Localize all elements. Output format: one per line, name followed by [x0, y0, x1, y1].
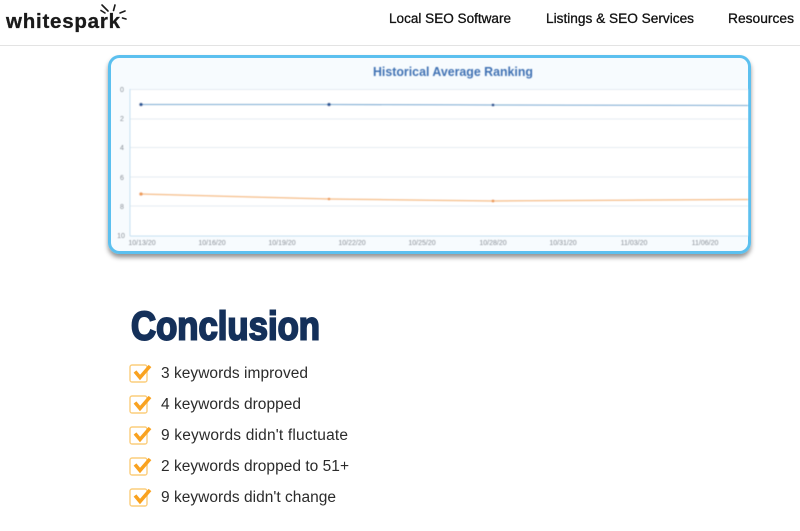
series: orange line	[139, 192, 748, 202]
y axis labels: 0	[120, 87, 124, 94]
icon: spark rays	[101, 5, 126, 19]
checklist	[130, 365, 349, 506]
y axis labels: 6	[120, 175, 124, 182]
item: 9 keywords didn't fluctuate: 9 keywords didn't fluctuate	[161, 427, 348, 444]
chart title: Historical Average Ranking	[373, 65, 533, 79]
header	[0, 5, 800, 46]
x axis labels: 10/16/20	[198, 240, 226, 247]
x axis labels: 10/28/20	[479, 240, 507, 247]
heading: Conclusion: Conclusion	[131, 304, 320, 348]
x axis labels: 10/19/20	[268, 240, 296, 247]
x axis labels: 10/22/20	[338, 240, 366, 247]
navigation: Local SEO Software	[389, 11, 511, 26]
y axis labels: 10	[117, 233, 125, 240]
series: blue line	[139, 103, 748, 106]
logo: whitespark: whitespark	[5, 10, 121, 33]
x axis labels: 11/06/20	[692, 240, 718, 247]
item: 9 keywords didn't change: 9 keywords didn't change	[161, 489, 336, 506]
line chart	[117, 87, 748, 247]
x axis labels: 10/31/20	[549, 240, 577, 247]
x axis labels: 11/03/20	[621, 240, 647, 247]
y axis labels: 2	[120, 116, 124, 123]
x axis labels: 10/25/20	[408, 240, 436, 247]
x axis labels: 10/13/20	[128, 240, 156, 247]
y axis labels	[117, 87, 125, 240]
item: 4 keywords dropped: 4 keywords dropped	[161, 396, 301, 413]
navigation: Listings & SEO Services	[546, 11, 694, 26]
x axis labels	[128, 240, 718, 247]
item: 2 keywords dropped to 51+: 2 keywords dropped to 51+	[161, 458, 349, 475]
panel: historical average ranking chart	[110, 56, 750, 252]
item: 3 keywords improved: 3 keywords improved	[161, 365, 308, 382]
navigation	[389, 11, 794, 26]
y axis labels: 4	[120, 145, 124, 152]
y axis labels: 8	[120, 204, 124, 211]
navigation: Resources	[728, 11, 794, 26]
